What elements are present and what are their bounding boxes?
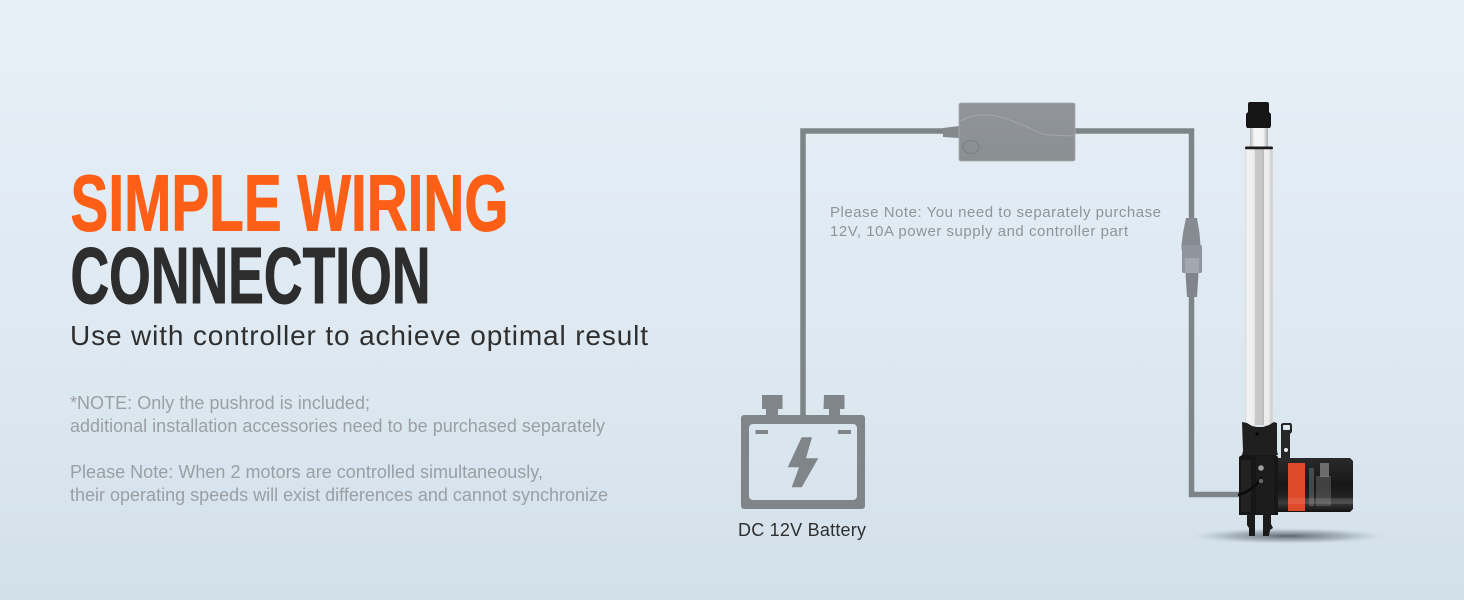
linear actuator bbox=[1190, 102, 1386, 544]
battery body bbox=[741, 415, 865, 509]
battery minus and plus marks bbox=[756, 430, 768, 434]
motor power wire bbox=[1238, 477, 1262, 495]
heading: simple wiring: SIMPLE WIRING bbox=[70, 158, 508, 248]
tube collar bbox=[1245, 146, 1273, 149]
note: two motors bbox=[70, 462, 608, 505]
title bbox=[70, 158, 508, 320]
top clevis bbox=[1246, 102, 1271, 128]
lightning bolt bbox=[788, 437, 818, 487]
note: pushrod only: *NOTE: Only the pushrod is included; bbox=[70, 393, 370, 413]
note: pushrod only: additional installation accessories need to be purchased separately bbox=[70, 416, 605, 436]
motor highlight band bbox=[1288, 498, 1353, 504]
piston rod bbox=[1250, 128, 1268, 148]
wiring cable bbox=[803, 131, 1244, 494]
heading: connection: CONNECTION bbox=[70, 231, 430, 320]
motor body bbox=[1278, 458, 1353, 512]
motor label bbox=[1288, 463, 1305, 511]
ground shadow bbox=[1190, 528, 1386, 544]
gearbox housing bbox=[1242, 422, 1278, 455]
icon: power adapter bbox=[943, 103, 1075, 161]
aluminium tube bbox=[1245, 149, 1273, 425]
battery terminals bbox=[762, 395, 782, 416]
icon: battery bbox=[741, 395, 865, 509]
note: two motors: their operating speeds will exist differences and cannot synchronize bbox=[70, 485, 608, 505]
note: two motors: Please Note: When 2 motors are controlled simultaneously, bbox=[70, 462, 543, 482]
power supply note: 12V, 10A power supply and controller part bbox=[830, 223, 1129, 240]
subtitle: Use with controller to achieve optimal result bbox=[70, 320, 648, 351]
icon: inline connector bbox=[1182, 218, 1202, 297]
rear clevis feet bbox=[1247, 515, 1255, 536]
battery label: DC 12V Battery bbox=[738, 520, 866, 540]
note: pushrod only bbox=[70, 393, 605, 436]
power supply note bbox=[830, 204, 1161, 240]
motor label text block bbox=[1309, 463, 1331, 506]
power supply note: Please Note: You need to separately purchase bbox=[830, 204, 1161, 221]
mounting bracket bbox=[1281, 423, 1292, 459]
